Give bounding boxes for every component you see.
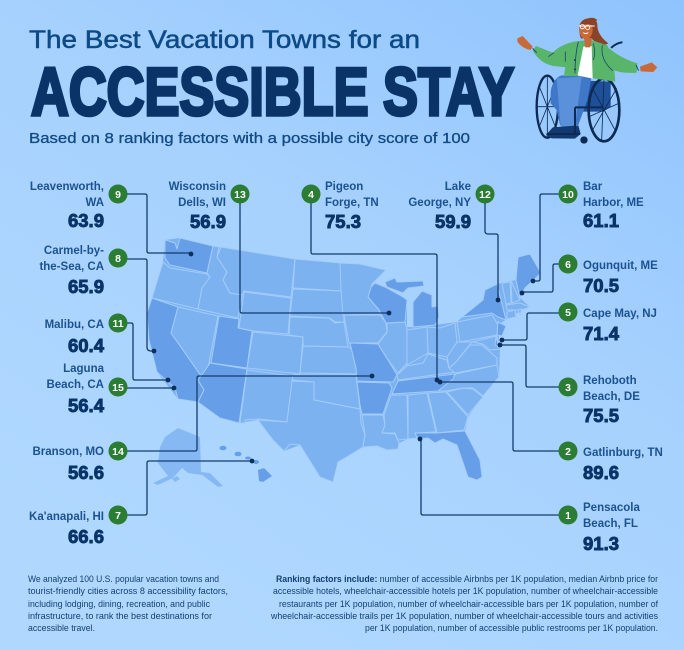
callout: Pigeon Forge, TN: 75.3	[325, 211, 361, 232]
callout: Laguna Beach, CA: 15	[112, 382, 124, 394]
callout: Lake George, NY: 59.9	[435, 211, 471, 232]
callout: Ka'anapali, HI: 66.6	[68, 526, 104, 547]
callout: Rehoboth Beach, DE: 3	[565, 382, 571, 394]
ranking factors note: Ranking factors include: number of accessible Airbnbs per 1K population, median Airbnb price for	[276, 573, 658, 584]
callout: Ogunquit, ME: Ogunquit, ME	[583, 260, 658, 272]
callout: Pigeon Forge, TN: 4	[308, 189, 314, 201]
callout: Rehoboth Beach, DE	[498, 343, 640, 426]
callout: Lake George, NY: Lake	[445, 181, 471, 193]
callout: Lake George, NY: George, NY	[408, 197, 471, 209]
Hawaii	[220, 446, 272, 482]
callout: Bar Harbor, ME: Harbor, ME	[583, 197, 644, 209]
callout: Cape May, NJ	[500, 302, 657, 344]
subtitle: Based on 8 ranking factors with a possible city score of 100	[29, 131, 470, 147]
callout: Bar Harbor, ME: Bar	[583, 181, 603, 193]
callout: Wisconsin Dells, WI: 56.9	[190, 211, 226, 232]
callout: Rehoboth Beach, DE: Beach, DE	[583, 391, 640, 403]
callout: Malibu, CA: Malibu, CA	[45, 319, 104, 331]
contiguous states	[147, 238, 541, 482]
methodology note: infrastructure, to rank the best destinations for	[28, 610, 212, 621]
callout: Laguna Beach, CA: Laguna	[63, 363, 105, 375]
callout: Ka'anapali, HI: 7	[115, 510, 121, 522]
callout: Pigeon Forge, TN: Forge, TN	[325, 197, 379, 209]
callout: Cape May, NJ: 5	[565, 307, 571, 319]
callout: Pigeon Forge, TN	[302, 181, 439, 382]
callout: Bar Harbor, ME: 10	[562, 189, 574, 201]
callout: Laguna Beach, CA: 56.4	[68, 395, 105, 416]
callout: Pensacola Beach, FL: Pensacola	[583, 502, 640, 514]
methodology note: accessible travel.	[28, 622, 95, 633]
callout: Pigeon Forge, TN: Pigeon	[325, 181, 363, 193]
Alaska	[153, 428, 223, 487]
callout: Leavenworth, WA: 63.9	[68, 210, 104, 231]
callout: Ka'anapali, HI: Ka'anapali, HI	[29, 511, 104, 523]
ranking factors note: restaurants per 1K population, number of wheelchair-accessible bars per 1K population, number of	[279, 598, 658, 609]
icon: woman in wheelchair	[517, 18, 657, 144]
callout: Carmel-by-the-Sea, CA: 8	[115, 253, 121, 265]
methodology note: including lodging, dining, recreation, and public	[28, 598, 210, 609]
callout: Branson, MO	[32, 374, 374, 483]
callout: Pensacola Beach, FL: 91.3	[583, 533, 619, 554]
ranking factors note: per 1K population, number of accessible public restrooms per 1K population.	[365, 622, 658, 633]
callout: Wisconsin Dells, WI: 13	[234, 189, 246, 201]
callout: Branson, MO: 14	[112, 446, 124, 458]
ranking factors note: wheelchair-accessible trails per 1K population, number of wheelchair-accessible tours and activities	[270, 610, 658, 621]
callout: Lake George, NY: 12	[479, 189, 491, 201]
title: line one: The Best Vacation Towns for an	[29, 26, 420, 54]
callout: Cape May, NJ: Cape May, NJ	[583, 308, 657, 320]
callout: Cape May, NJ: 71.4	[583, 323, 620, 344]
callout: Leavenworth, WA: Leavenworth,	[30, 181, 104, 193]
callout: Ogunquit, ME: 70.5	[583, 275, 619, 296]
callout: Gatlinburg, TN: Gatlinburg, TN	[583, 447, 663, 459]
callout: Ogunquit, ME: 6	[565, 259, 571, 271]
callout: Malibu, CA: 11	[112, 318, 124, 330]
callout: Bar Harbor, ME: 61.1	[583, 210, 619, 231]
callout: Leavenworth, WA: 9	[115, 189, 121, 201]
callout: Carmel-by-the-Sea, CA: 65.9	[68, 276, 104, 297]
callout: Wisconsin Dells, WI	[169, 181, 391, 315]
methodology note: tourist-friendly cities across 8 accessibility factors,	[28, 585, 228, 596]
ranking factors note: accessible hotels, wheelchair-accessible hotels per 1K population, number of wheelchair-accessible	[273, 585, 658, 596]
callout: Laguna Beach, CA	[46, 363, 176, 416]
callout: Bar Harbor, ME	[531, 181, 644, 283]
methodology note	[28, 573, 228, 633]
callout: Malibu, CA	[45, 314, 170, 382]
callout: Branson, MO: 56.6	[68, 462, 104, 483]
callout: Carmel-by-the-Sea, CA: the-Sea, CA	[39, 261, 104, 273]
callout: Pensacola Beach, FL: Beach, FL	[583, 518, 638, 530]
callout: Rehoboth Beach, DE: 75.5	[583, 405, 619, 426]
map: United States	[147, 238, 541, 487]
callout: Gatlinburg, TN: 2	[565, 446, 571, 458]
callout: Ka'anapali, HI	[29, 459, 254, 547]
callout: Rehoboth Beach, DE: Rehoboth	[583, 375, 637, 387]
callout: Gatlinburg, TN	[438, 380, 663, 483]
callout: Pensacola Beach, FL: 1	[565, 510, 571, 522]
callout: Wisconsin Dells, WI: Wisconsin	[169, 181, 226, 193]
callout: Branson, MO: Branson, MO	[32, 446, 104, 458]
callout: Carmel-by-the-Sea, CA	[39, 245, 156, 353]
title: accessible stay: ACCESSIBLE STAY	[31, 54, 514, 130]
callout: Carmel-by-the-Sea, CA: Carmel-by-	[44, 245, 104, 257]
callout: Leavenworth, WA	[30, 181, 193, 256]
methodology note: We analyzed 100 U.S. popular vacation towns and	[28, 573, 219, 584]
callout: Malibu, CA: 60.4	[68, 335, 105, 356]
callout: Wisconsin Dells, WI: Dells, WI	[178, 197, 226, 209]
callout: Leavenworth, WA: WA	[85, 197, 104, 209]
callout: Laguna Beach, CA: Beach, CA	[46, 379, 104, 391]
callout: Ogunquit, ME	[520, 254, 658, 296]
callout: Lake George, NY	[408, 181, 500, 302]
callout: Gatlinburg, TN: 89.6	[583, 462, 619, 483]
callout: Pensacola Beach, FL	[418, 437, 640, 554]
ranking factors note	[270, 573, 658, 633]
